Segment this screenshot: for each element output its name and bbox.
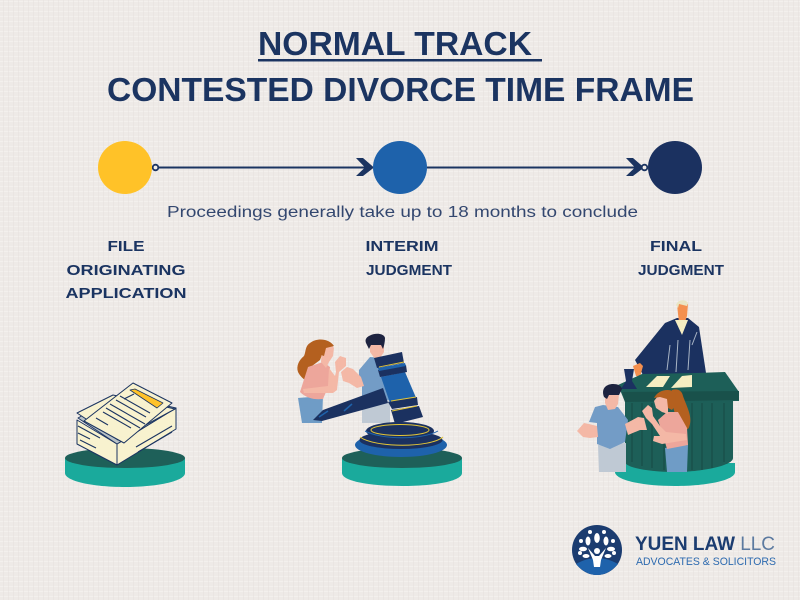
- face: [605, 394, 619, 410]
- timeline caption: Proceedings generally take up to 18 months to conclude: [167, 204, 638, 221]
- small gavel: [621, 369, 637, 389]
- yellow milestone dot: [98, 141, 152, 194]
- collar: [675, 320, 688, 335]
- hair: [366, 334, 385, 349]
- title line 1: normal track: NORMAL TRACK: [258, 25, 532, 62]
- podium: [615, 463, 735, 486]
- step 2 label: INTERIM: [366, 238, 438, 255]
- arm and hand: [341, 367, 364, 388]
- gavel base: [355, 422, 447, 457]
- step 2 label: JUDGMENT: [366, 262, 452, 279]
- paper stack: [77, 383, 176, 465]
- shirt: [658, 412, 688, 449]
- step 1 label: ORIGINATING: [66, 262, 186, 279]
- face: [321, 344, 334, 368]
- hands: [633, 363, 643, 377]
- jeans: [298, 396, 323, 423]
- title: [107, 25, 694, 108]
- man: [577, 384, 647, 472]
- step 1 label: APPLICATION: [66, 285, 186, 302]
- face: [370, 344, 384, 359]
- documents on bench: [646, 376, 670, 387]
- arms: [303, 356, 346, 393]
- hair top: [654, 390, 676, 410]
- logo wordmark: YUEN LAW LLC: [635, 533, 775, 555]
- face: [654, 396, 668, 414]
- step 1 label: FILE: [108, 238, 144, 255]
- shirt: [359, 357, 391, 400]
- gavel head: [381, 372, 417, 403]
- trousers: [598, 443, 626, 472]
- arms and hands: [577, 423, 598, 438]
- illustration: documents on podium: [65, 383, 185, 487]
- man figure: [341, 334, 391, 423]
- judge: [633, 300, 717, 387]
- arms and hands: [642, 405, 687, 444]
- hair: [603, 384, 622, 399]
- judge's bench: [618, 369, 739, 472]
- gavel: [313, 352, 447, 457]
- logo tagline: ADVOCATES & SOLICITORS: [636, 556, 776, 568]
- trousers: [362, 398, 390, 423]
- logo: Yuen Law LLC: [572, 525, 776, 575]
- step 3 label: [638, 238, 724, 279]
- navy milestone dot: [648, 141, 702, 194]
- connector arrow 1: [153, 158, 374, 176]
- podium: [65, 448, 185, 487]
- step 3 label: JUDGMENT: [638, 262, 724, 279]
- gavel handle: [313, 388, 388, 421]
- step 2 label: [366, 238, 452, 279]
- woman: [642, 389, 690, 472]
- jeans: [665, 445, 688, 472]
- connector arrow 2: [427, 158, 647, 176]
- illustration: couple arguing behind gavel: [297, 334, 462, 486]
- shirt: [300, 362, 330, 399]
- step 1 label: [66, 238, 186, 302]
- logo tree emblem: [572, 525, 622, 575]
- hair tail: [672, 389, 690, 429]
- illustration: judge at bench with couple: [577, 300, 739, 486]
- logo wordmark: [635, 533, 776, 568]
- head: [677, 304, 688, 322]
- blue milestone dot: [373, 141, 427, 194]
- woman figure: [297, 339, 346, 423]
- podium: [342, 448, 462, 486]
- hair: [297, 339, 333, 381]
- timeline: [98, 141, 702, 194]
- robe: [635, 318, 706, 376]
- shirt: [589, 405, 628, 449]
- step 3 label: FINAL: [650, 238, 702, 255]
- title line 2: contested divorce time frame: CONTESTED DIVORCE TIME FRAME: [107, 71, 694, 108]
